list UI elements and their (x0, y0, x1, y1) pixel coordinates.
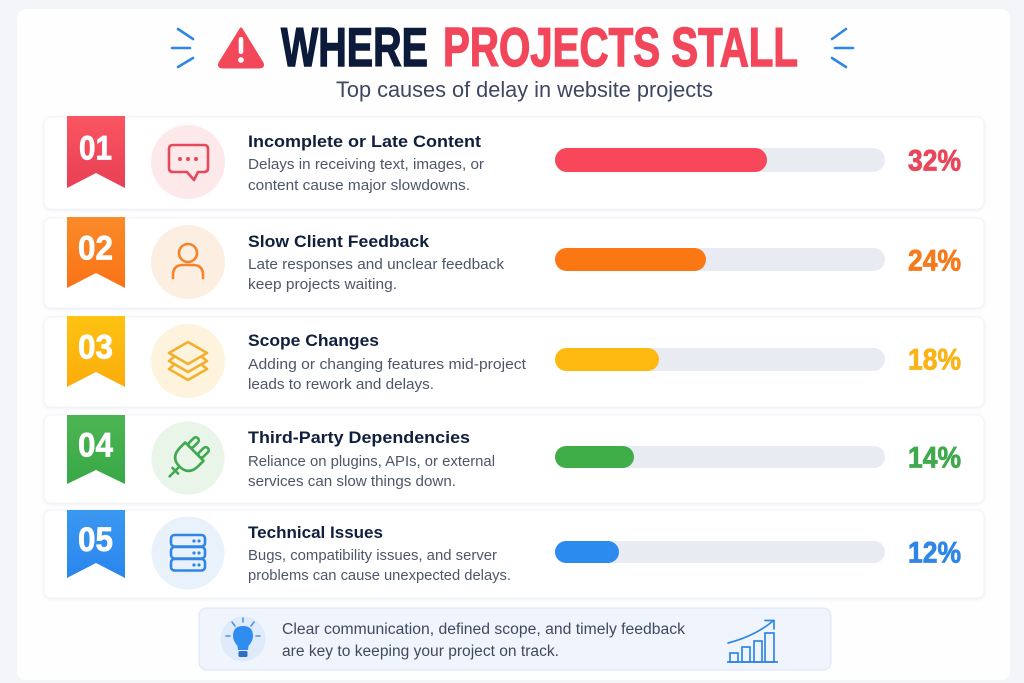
icon: warning triangle (219, 29, 263, 67)
panel: cause 05 (44, 510, 984, 598)
panel: cause 04 (44, 415, 984, 503)
title: PROJECTS STALL (443, 16, 798, 78)
header (172, 16, 853, 102)
subtitle: Top causes of delay in website projects (336, 77, 713, 102)
text: cause 05: Bugs, compatibility issues, and server (248, 548, 497, 564)
text: cause 05: problems can cause unexpected delays. (248, 568, 511, 584)
icon: speech bubble (151, 125, 225, 199)
ribbon 05 (67, 510, 125, 578)
text: cause 03 (248, 331, 526, 393)
callout text: are key to keeping your project on track. (282, 643, 559, 660)
text: cause 01: Delays in receiving text, images, or (248, 157, 484, 173)
icon: server stack (152, 516, 224, 590)
text: cause 05 (248, 523, 511, 584)
text: cause 04: Third-Party Dependencies (248, 428, 470, 447)
value 32%: 32% (908, 144, 961, 178)
bar 14 percent (555, 446, 885, 468)
text: cause 01 (248, 132, 484, 194)
panel: cause 01 (44, 116, 984, 209)
icon: person (151, 225, 225, 299)
right rays (832, 29, 853, 67)
panel: cause 02 (44, 217, 984, 308)
text: cause 02 (248, 232, 505, 293)
icon: plug (152, 422, 224, 494)
text: cause 02: Late responses and unclear feedback (248, 257, 505, 273)
icon: layers (151, 324, 225, 398)
bar 12 percent (555, 541, 885, 563)
text: cause 02: keep projects waiting. (248, 277, 397, 293)
value 12%: 12% (908, 536, 961, 570)
value 24%: 24% (908, 244, 961, 278)
left rays (172, 29, 193, 67)
ribbon 04: 04 (78, 426, 113, 464)
text: cause 05: Technical Issues (248, 523, 383, 542)
ribbon 03 (67, 316, 125, 387)
ribbon 01 (67, 116, 125, 188)
icon: light bulb (220, 616, 266, 662)
ribbon 04 (67, 415, 125, 484)
bar 18 percent (555, 348, 885, 371)
text: cause 02: Slow Client Feedback (248, 232, 430, 251)
ribbon 05: 05 (78, 521, 113, 559)
text: cause 03: leads to rework and delays. (248, 377, 434, 393)
title: WHERE (281, 16, 428, 78)
bar 24 percent (555, 248, 885, 271)
ribbon 02 (67, 217, 125, 288)
ribbon 02: 02 (78, 230, 113, 268)
text: cause 04: services can slow things down. (248, 474, 456, 490)
text: cause 01: content cause major slowdowns. (248, 178, 470, 194)
callout text (282, 621, 685, 660)
text: cause 04 (248, 428, 495, 490)
callout: key takeaway (199, 608, 831, 670)
panel: cause 03 (44, 316, 984, 407)
value 18%: 18% (908, 344, 961, 376)
bar 32 percent (555, 148, 885, 172)
text: cause 04: Reliance on plugins, APIs, or external (248, 454, 495, 470)
icon: growth chart (727, 620, 778, 662)
ribbon 03: 03 (78, 328, 113, 366)
callout text: Clear communication, defined scope, and timely feedback (282, 621, 685, 638)
text: cause 03: Adding or changing features mid-project (248, 357, 526, 373)
value 14%: 14% (908, 442, 961, 474)
text: cause 03: Scope Changes (248, 331, 379, 350)
text: cause 01: Incomplete or Late Content (248, 132, 481, 151)
ribbon 01: 01 (79, 130, 112, 168)
